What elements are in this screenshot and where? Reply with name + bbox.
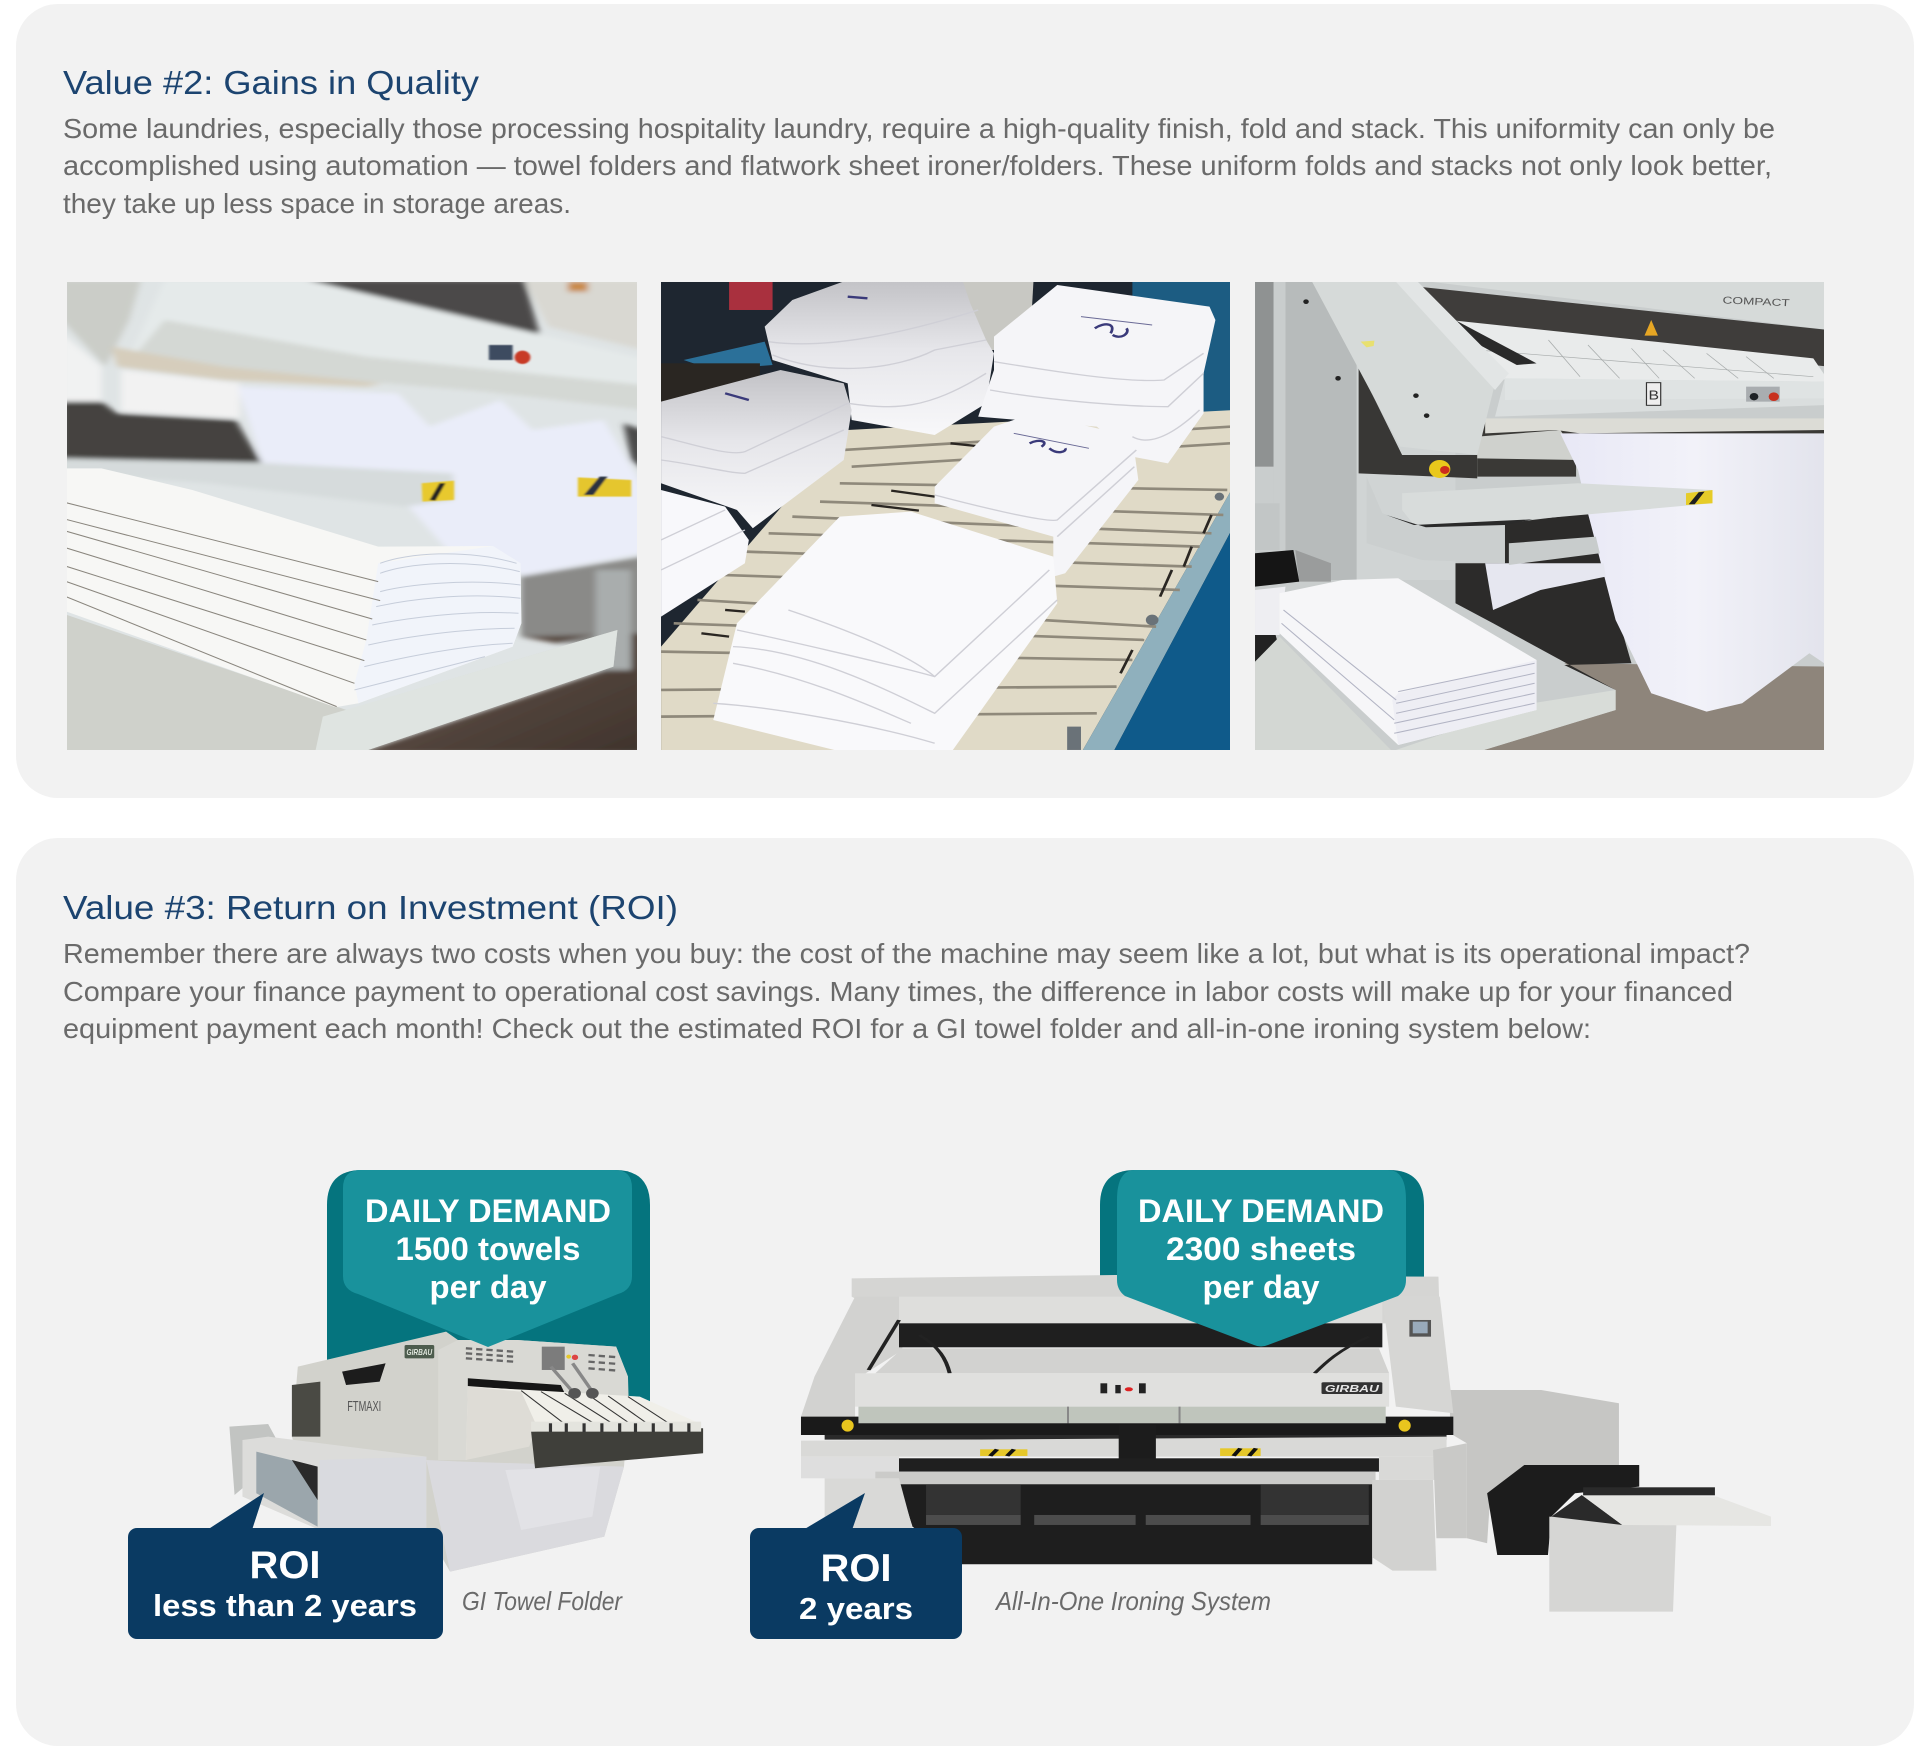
callout: ROI less than 2 years: less than 2 years [153,1588,417,1623]
icon: towel folder machine [229,1332,703,1572]
caption: GI towel folder: GI Towel Folder [462,1586,623,1616]
callout: ROI 2 years [750,1493,962,1639]
text block: value 3 description: equipment payment each month! Check out the estimated ROI for a GI towel folder and all-in-one ironing system below: [63,1013,1591,1044]
photo: ironer folder with sheet and stack: COMPACT [1722,295,1790,309]
icon: all-in-one ironer machine [801,1275,1771,1612]
callout: daily demand sheets: DAILY DEMAND [1138,1193,1384,1229]
text block: value 3 description: Remember there are always two costs when you buy: the cost of the machine may seem like a lot, but what is its operational impact? [63,938,1750,969]
teal backing card: ironer [1100,1170,1424,1290]
panel: value 2 gains in quality [16,4,1914,798]
callout: ROI 2 years: 2 years [799,1591,913,1626]
callout: daily demand sheets [1117,1170,1406,1346]
callout: daily demand sheets: per day [1202,1269,1320,1305]
icon: towel folder machine: GIRBAU [407,1348,433,1358]
callout: ROI less than 2 years [128,1493,443,1639]
callout: ROI less than 2 years: ROI [250,1544,320,1587]
callout: daily demand towels [343,1170,632,1347]
photo: ironer folder with sheet and stack: B [1648,388,1659,403]
chart block: all-in-one ironing system [750,1170,1771,1639]
heading: value 3: Value #3: Return on Investment (ROI) [63,889,678,926]
photo: folded sheets stack on folder tray [62,280,643,753]
callout: daily demand towels: DAILY DEMAND [365,1193,611,1229]
icon: all-in-one ironer machine: GIRBAU [1325,1384,1379,1394]
text block: value 2 description: they take up less space in storage areas. [63,188,571,219]
panel: value 3 return on investment [16,838,1914,1746]
heading: value 2: Value #2: Gains in Quality [63,64,480,101]
text block: value 2 description [63,113,1775,219]
callout: daily demand towels: per day [430,1269,547,1305]
icon: towel folder machine: FTMAXI [347,1398,381,1415]
text block: value 3 description: Compare your finance payment to operational cost savings. Many times, the difference in labor costs will make up for your financed [63,976,1733,1007]
callout: daily demand sheets: 2300 sheets [1166,1231,1356,1267]
chart block: GI towel folder [128,1170,703,1639]
photo: ironer folder with sheet and stack [1255,280,1829,753]
callout: ROI 2 years: ROI [820,1547,892,1590]
photo: white towels on conveyor [661,280,1235,753]
text block: value 2 description: Some laundries, especially those processing hospitality laundry, require a high-quality finish, fold and stack. This uniformity can only be [63,113,1775,144]
text block: value 2 description: accomplished using automation — towel folders and flatwork sheet ironer/folders. These uniform folds and stacks not only look better, [63,150,1772,181]
callout: daily demand towels: 1500 towels [396,1231,580,1267]
caption: all-in-one ironing system: All-In-One Ironing System [994,1586,1271,1616]
teal backing card: towel folder [327,1170,650,1410]
text block: value 3 description [63,938,1750,1044]
